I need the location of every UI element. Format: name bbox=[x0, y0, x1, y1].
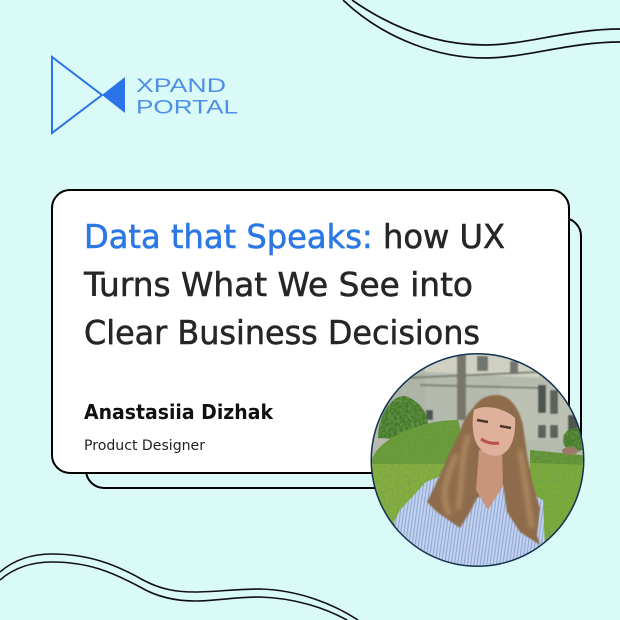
title: Clear Business Decisions bbox=[84, 313, 480, 352]
title: Data that Speaks: how UX bbox=[84, 217, 505, 256]
logo wordmark: XPAND bbox=[136, 76, 226, 97]
front card bbox=[52, 190, 569, 473]
author role: Product Designer bbox=[84, 438, 205, 454]
title bbox=[83, 217, 505, 352]
logo wordmark bbox=[136, 76, 238, 118]
hair highlights bbox=[445, 435, 532, 528]
hair bbox=[427, 395, 540, 545]
visitors behind hedge bbox=[562, 447, 578, 455]
title: Turns What We See into bbox=[83, 265, 473, 304]
logo bbox=[52, 57, 238, 133]
top right wave lines bbox=[343, 0, 620, 58]
bottom left wave lines bbox=[0, 554, 358, 620]
building bbox=[370, 350, 585, 470]
face bbox=[473, 407, 515, 456]
eyes and lips bbox=[477, 420, 511, 443]
shirt bbox=[394, 476, 545, 566]
author name: Anastasiia Dizhak bbox=[84, 400, 274, 424]
logo wordmark: PORTAL bbox=[136, 98, 238, 118]
logo mark bbox=[52, 57, 125, 133]
hedges bbox=[370, 396, 590, 565]
back card bbox=[86, 218, 581, 488]
neck bbox=[476, 450, 503, 510]
portrait photo bbox=[370, 350, 590, 575]
